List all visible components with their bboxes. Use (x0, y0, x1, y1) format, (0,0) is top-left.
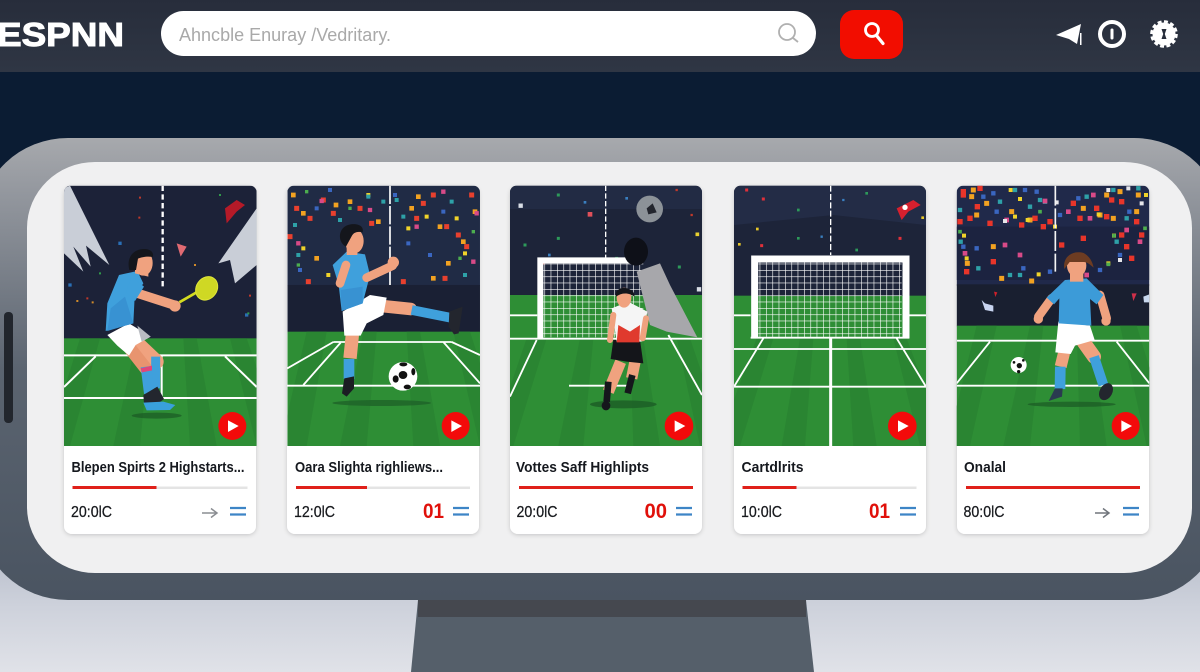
card 3 (508, 185, 704, 537)
monitor frame (0, 138, 1200, 600)
card 4 time: 10:0lC (741, 504, 782, 521)
thumbnail: goalkeeper at goal (510, 186, 702, 446)
search field (161, 11, 816, 56)
monitor stand (411, 600, 814, 672)
thumbnail: female footballer (956, 186, 1150, 446)
thumbnail: tennis player (64, 186, 257, 446)
card 3 menu icon (676, 508, 692, 514)
card 4 title: Cartdlrits (742, 459, 804, 476)
card 2 title: Oara Slighta righliews... (295, 459, 443, 476)
card 4 score: 01 (869, 500, 890, 523)
card 1 menu icon (230, 508, 246, 514)
card 4 progress bar (742, 486, 916, 489)
thumbnail: empty goal (734, 186, 926, 446)
thumbnail: footballer kicking (287, 186, 480, 446)
red search button (840, 10, 903, 59)
card 5 progress bar (966, 486, 1140, 489)
card 3 progress bar (519, 486, 693, 489)
ESPN logo: ESPNN (0, 16, 124, 53)
screen panel (27, 162, 1192, 573)
icon: info circle (1100, 22, 1124, 46)
card 2 time: 12:0lC (294, 504, 335, 521)
card 1 (62, 185, 258, 537)
top navigation bar (0, 0, 1200, 72)
card 1 progress bar (72, 486, 248, 489)
card 2 (285, 185, 481, 537)
card 5 arrow icon (1095, 508, 1109, 518)
card 3 score: 00 (644, 500, 667, 523)
card 1 arrow icon (202, 508, 217, 518)
card 3 title: Vottes Saff Highlipts (516, 459, 649, 476)
card 1 time: 20:0lC (71, 504, 112, 521)
card 3 time: 20:0lC (516, 504, 558, 521)
card 5 menu icon (1123, 508, 1139, 514)
card 2 menu icon (453, 508, 469, 514)
card 5 title: Onalal (964, 459, 1006, 476)
side button (4, 312, 13, 423)
card 4 (732, 185, 928, 537)
card 1 title: Blepen Spirts 2 Highstarts... (72, 459, 244, 476)
icon: settings gear (1152, 22, 1176, 46)
card 2 score: 01 (423, 500, 444, 523)
card 2 progress bar (296, 486, 470, 489)
card 5 time: 80:0lC (964, 504, 1004, 521)
search field: Ahncble Enuray /Vedritary. (179, 25, 391, 45)
card 4 menu icon (900, 508, 916, 514)
icon: send (1056, 24, 1082, 45)
card 5 (955, 185, 1151, 537)
